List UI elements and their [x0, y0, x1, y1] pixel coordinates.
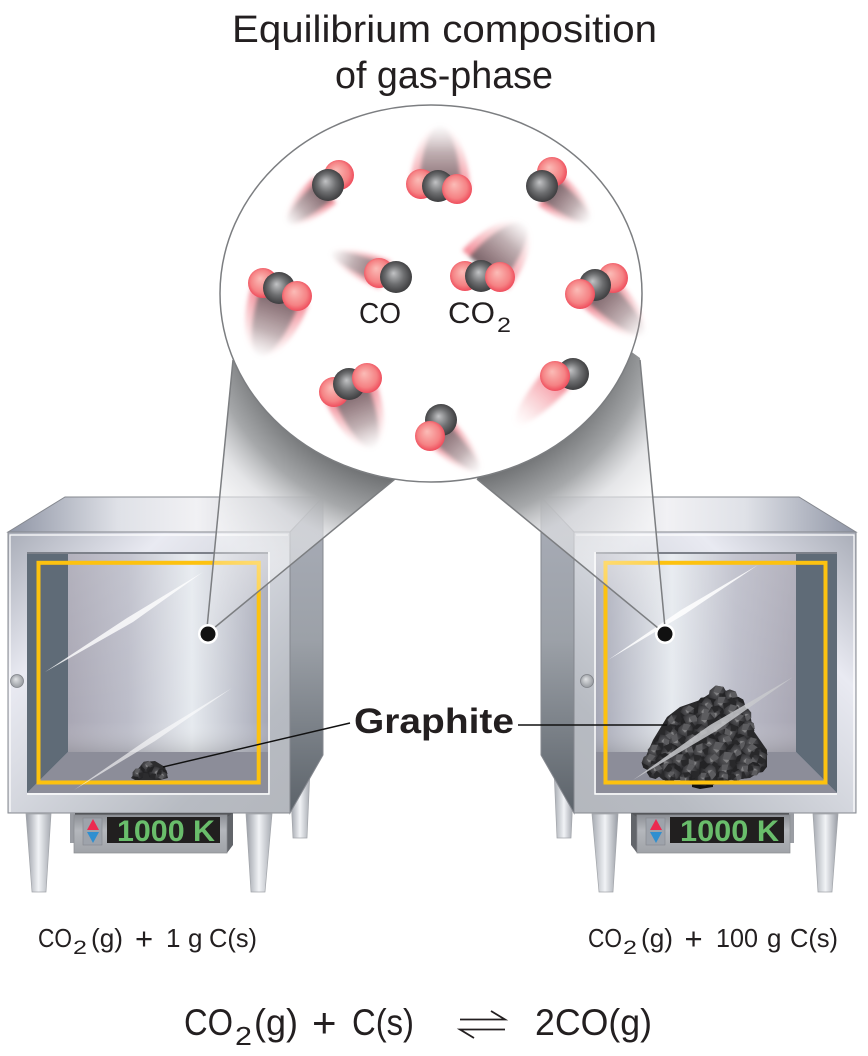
motion trails: [231, 126, 658, 483]
graphite leader lines: [163, 723, 667, 767]
CO molecule center: [364, 258, 412, 293]
right sample point: [655, 624, 675, 644]
left condition label: (g): [91, 923, 123, 953]
left condition label: +: [135, 921, 153, 956]
left sample point: [198, 624, 218, 644]
right condition label: (g): [641, 923, 673, 953]
equilibrium equation: +: [312, 999, 337, 1046]
magnified gas-phase circle: [220, 105, 642, 482]
CO2 molecule right: [565, 263, 628, 309]
left door knob: [10, 674, 24, 688]
left condition label: 1: [166, 923, 180, 953]
equilibrium equation: CO: [184, 1002, 233, 1043]
right yellow window frame: [606, 563, 826, 782]
CO2 molecule lower left: [319, 363, 382, 407]
right condition label: 100: [716, 923, 758, 953]
CO2 label: 2: [497, 314, 511, 337]
large graphite pile: [640, 685, 770, 789]
equilibrium equation: 2CO(g): [535, 1002, 652, 1043]
CO molecule bottom: [415, 404, 457, 451]
right condition label: C(s): [790, 923, 838, 953]
equilibrium equation: 2: [235, 1021, 252, 1051]
right condition label: +: [684, 921, 703, 956]
right funnel to magnified view: [477, 300, 665, 634]
CO molecule top left: [312, 160, 354, 201]
left condition label: g: [188, 923, 202, 953]
graphite label: Graphite: [354, 702, 514, 741]
small graphite pile: [131, 759, 169, 781]
title: Equilibrium composition: [232, 9, 657, 51]
CO2 label: [448, 297, 511, 337]
left condition label: [38, 921, 257, 959]
CO2 molecule top: [406, 169, 472, 204]
equilibrium equation: C(s): [352, 1002, 414, 1043]
right door knob: [580, 674, 594, 688]
CO molecule top right: [526, 157, 567, 202]
equilibrium arrows: [460, 1011, 505, 1038]
left condition label: CO: [38, 923, 72, 953]
right condition label: [588, 921, 838, 959]
glass glare streaks: [45, 565, 793, 790]
right condition label: 2: [623, 938, 637, 959]
right condition label: g: [767, 923, 781, 953]
left yellow window frame: [38, 563, 259, 782]
right condition label: CO: [588, 923, 622, 953]
right temperature display: 1000 K: [680, 815, 779, 848]
title: of gas-phase: [335, 55, 553, 97]
CO label: CO: [359, 298, 401, 330]
CO2 label: CO: [448, 297, 495, 330]
CO2 molecule left: [248, 268, 312, 311]
equilibrium equation: (g): [254, 1002, 298, 1043]
title: [232, 9, 657, 97]
left funnel to magnified view: [207, 300, 395, 634]
left condition label: C(s): [209, 923, 257, 953]
left condition label: 2: [73, 938, 87, 959]
right oven: [541, 497, 856, 892]
left temperature display: 1000 K: [117, 815, 215, 848]
CO molecule lower right: [540, 358, 589, 391]
equilibrium equation: [184, 999, 652, 1051]
left oven: [8, 497, 323, 892]
CO2 molecule center: [450, 260, 515, 292]
